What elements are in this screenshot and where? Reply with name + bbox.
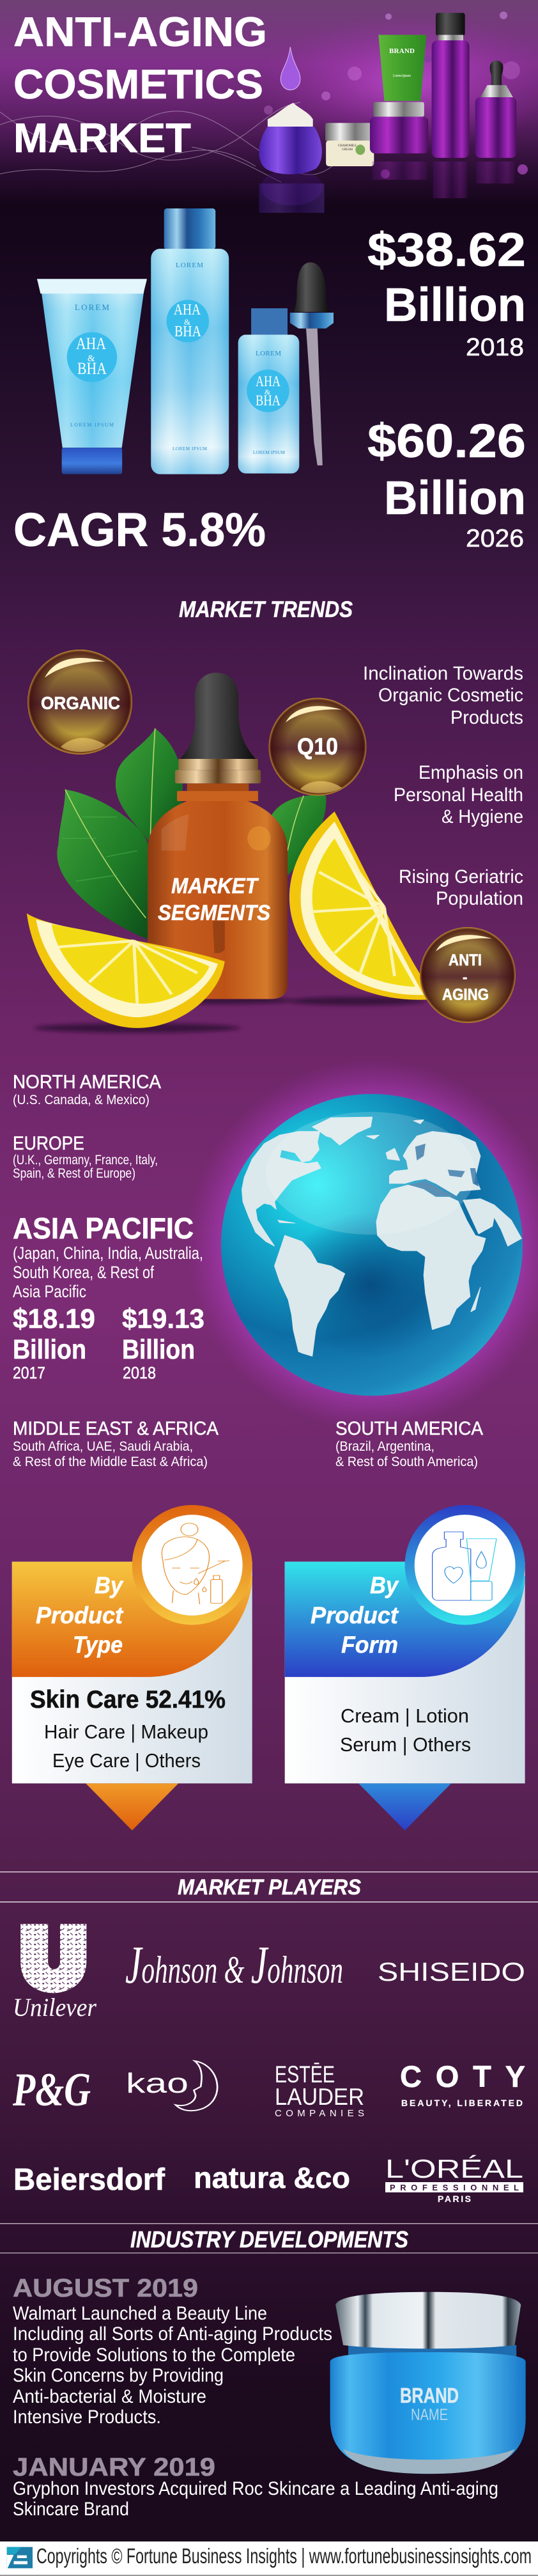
logo: Natura and Co: natura &co — [194, 2161, 350, 2194]
market trends list: & Hygiene — [442, 806, 523, 827]
product labels: & — [184, 317, 190, 327]
jar labels: BRAND — [389, 47, 415, 55]
segment list: Skin Care 52.41% — [30, 1686, 226, 1713]
product labels: AHA — [256, 373, 281, 389]
illustration: blue cream jar: NAME — [411, 2406, 448, 2424]
asia pacific 2018 value: $19.13 — [122, 1304, 204, 1334]
header label: Type — [73, 1632, 123, 1658]
header label: Product — [311, 1602, 399, 1628]
market trends list: Emphasis on — [419, 762, 523, 783]
CAGR: CAGR 5.8% — [13, 503, 266, 556]
cream jar — [325, 123, 374, 166]
development: August 2019: AUGUST 2019 — [13, 2274, 198, 2302]
logo: Kao: kao — [126, 2068, 188, 2099]
region: europe — [13, 1133, 158, 1181]
region: asia pacific: ASIA PACIFIC — [13, 1212, 194, 1245]
bubble: Q10: Q10 — [297, 733, 338, 760]
segment list: Cream | Lotion — [341, 1705, 469, 1727]
jar labels — [338, 47, 415, 152]
region: asia pacific: (Japan, China, India, Australia, — [13, 1244, 203, 1263]
region: middle east and africa: South Africa, UAE, Saudi Arabia, — [13, 1439, 193, 1454]
logo: L'Oreal: PARIS — [438, 2194, 471, 2204]
blue products — [37, 208, 334, 474]
product labels: AHA — [174, 302, 201, 318]
header label: Product — [36, 1602, 124, 1628]
product labels: & — [265, 387, 271, 396]
region: north america: (U.S. Canada, & Mexico) — [13, 1092, 150, 1107]
asia pacific 2018 value: 2018 — [123, 1363, 156, 1382]
purple dropper — [475, 61, 516, 158]
development: August 2019: Anti-bacterial & Moisture — [13, 2386, 206, 2407]
stat: 2018 market size — [367, 223, 526, 361]
logo: Johnson and Johnson: Johnson & Johnson — [125, 1935, 343, 1995]
region: europe: (U.K., Germany, France, Italy, — [13, 1152, 158, 1167]
region: middle east and africa: MIDDLE EAST & AFRICA — [13, 1418, 219, 1439]
header label: By — [370, 1572, 399, 1598]
logo: Estee Lauder: COMPANIES — [275, 2108, 364, 2119]
green tube — [378, 35, 426, 101]
product labels: LOREM IPSUM — [253, 450, 286, 455]
icon: bottle and tube — [405, 1505, 525, 1625]
card pointer — [358, 1783, 451, 1831]
amber bottle — [148, 673, 288, 999]
header shape — [12, 1562, 252, 1677]
development: August 2019: Skin Concerns by Providing — [13, 2365, 224, 2386]
product labels: LOREM IPSUM — [173, 446, 208, 451]
DNA strands — [0, 102, 332, 182]
stat: 2018 market size: $38.62 — [367, 223, 526, 276]
development: January 2019 — [13, 2453, 498, 2520]
jar labels: CHAMOMILE — [338, 144, 357, 148]
bubble: Q10 — [268, 698, 367, 795]
logo: Coty — [400, 2059, 525, 2108]
tube — [37, 279, 147, 474]
stat: 2026 market size — [367, 414, 526, 552]
bottle label — [158, 874, 270, 925]
bokeh glow — [256, 12, 538, 178]
product labels: LOREM IPSUM — [70, 422, 114, 428]
logo: Kao — [126, 2061, 217, 2111]
card body — [12, 1562, 252, 1783]
product labels: LOREM — [256, 350, 281, 357]
header shape — [285, 1562, 525, 1677]
lemon wedge left — [27, 914, 225, 1028]
region: asia pacific — [13, 1212, 204, 1382]
product labels: LOREM — [75, 302, 109, 312]
bottle label: MARKET — [171, 874, 259, 898]
development: August 2019 — [13, 2274, 332, 2428]
leaves — [57, 728, 326, 939]
segment list: Serum | Others — [340, 1733, 471, 1756]
icon: company logo — [7, 2547, 33, 2568]
asia pacific 2017 value: Billion — [13, 1334, 86, 1365]
water drop — [281, 47, 300, 90]
market trends list: Organic Cosmetic — [378, 685, 523, 706]
region: asia pacific: South Korea, & Rest of — [13, 1263, 154, 1282]
header label: By — [95, 1572, 124, 1598]
product labels: LOREM — [176, 262, 203, 269]
title: MARKET — [13, 114, 191, 161]
heading: industry developments: INDUSTRY DEVELOPMENTS — [130, 2226, 408, 2252]
heading: market trends: MARKET TRENDS — [179, 597, 353, 622]
logo: Estee Lauder: ESTĒE — [275, 2061, 335, 2088]
card pointer — [86, 1783, 178, 1831]
region: north america: NORTH AMERICA — [13, 1072, 161, 1093]
header label: Form — [341, 1632, 398, 1658]
continents — [242, 1117, 521, 1356]
title — [13, 8, 267, 161]
bubble: anti-aging: AGING — [442, 986, 489, 1004]
development: August 2019: Intensive Products. — [13, 2407, 161, 2428]
market trends list: Personal Health — [394, 785, 523, 806]
reflections — [259, 162, 515, 213]
header label — [36, 1572, 124, 1658]
jar labels: CREAM — [342, 148, 353, 152]
bubble: organic: ORGANIC — [41, 693, 120, 713]
product labels: & — [88, 354, 95, 364]
panel: by product type — [12, 1505, 252, 1831]
footer — [0, 2541, 538, 2576]
bubble: anti-aging: - — [463, 969, 467, 985]
logo: Unilever — [13, 1924, 96, 2022]
illustration: blue cream jar — [330, 2292, 526, 2474]
product labels: BHA — [174, 324, 202, 340]
logo: Coty: COTY — [400, 2059, 525, 2093]
stat: 2018 market size: Billion — [384, 278, 526, 331]
dropper — [290, 262, 334, 465]
purple jar — [370, 102, 428, 153]
cosmetics jars — [259, 13, 516, 213]
bubble: anti-aging: ANTI — [449, 951, 482, 969]
bottle label: SEGMENTS — [158, 901, 270, 925]
title: ANTI-AGING — [13, 8, 267, 55]
heading: market players: MARKET PLAYERS — [178, 1875, 361, 1900]
product labels — [70, 262, 286, 455]
globe — [187, 1059, 538, 1430]
development: August 2019: Walmart Launched a Beauty Line — [13, 2303, 267, 2324]
region: middle east and africa — [13, 1418, 219, 1469]
market trends list: Inclination Towards — [363, 663, 523, 684]
market trends list: Rising Geriatric — [399, 866, 523, 887]
logo: L'Oreal: PROFESSIONNEL — [390, 2183, 519, 2192]
logo: Estee Lauder: LAUDER — [275, 2084, 364, 2110]
tall purple bottle — [432, 13, 470, 158]
logo: Coty: BEAUTY, LIBERATED — [401, 2098, 523, 2108]
market trends list — [363, 663, 523, 909]
hero banner — [0, 12, 538, 213]
market trends list: Population — [436, 888, 523, 909]
stat: 2026 market size: 2026 — [466, 525, 524, 552]
logo: Unilever: Unilever — [13, 1993, 96, 2022]
jar labels: Lorem Ipsum — [393, 74, 411, 78]
asia pacific 2017 value: 2017 — [13, 1363, 45, 1382]
product labels: AHA — [76, 334, 106, 353]
asia pacific 2017 value — [13, 1304, 95, 1382]
development: August 2019: Including all Sorts of Anti-aging Products — [13, 2323, 332, 2345]
logo: Beiersdorf: Beiersdorf — [13, 2163, 165, 2197]
region: south america: SOUTH AMERICA — [335, 1418, 483, 1439]
shadows — [35, 997, 426, 1033]
development: January 2019: Gryphon Investors Acquired Roc Skincare a Leading Anti-aging — [13, 2478, 498, 2499]
title: COSMETICS — [13, 61, 263, 107]
bubble: organic — [27, 650, 132, 754]
region: south america: (Brazil, Argentina, — [335, 1439, 434, 1454]
stat: 2026 market size: Billion — [384, 471, 526, 524]
region: north america — [13, 1072, 161, 1107]
tall bottle — [151, 208, 229, 474]
region: south america — [335, 1418, 483, 1469]
stat: 2018 market size: 2018 — [466, 334, 524, 361]
segment list — [340, 1705, 471, 1756]
logo: Shiseido: SHISEIDO — [378, 1957, 525, 1987]
lemon wedge right — [289, 811, 436, 1000]
segment list — [30, 1686, 226, 1772]
stat: 2026 market size: $60.26 — [367, 414, 526, 467]
illustration: serum bottle with lemons — [27, 673, 436, 1033]
asia pacific 2018 value: Billion — [122, 1334, 195, 1365]
asia pacific 2018 value — [122, 1304, 204, 1382]
panel: by product form — [285, 1505, 525, 1831]
icon: face with serum — [132, 1505, 252, 1625]
region: europe: Spain, & Rest of Europe) — [13, 1166, 135, 1181]
logo: Estee Lauder — [275, 2061, 364, 2119]
logo: L'Oreal: L'ORÉAL — [385, 2154, 523, 2183]
development: August 2019: to Provide Solutions to the Complete — [13, 2345, 295, 2366]
market trends list: Products — [450, 707, 523, 728]
logo: P&G: P&G — [12, 2064, 91, 2116]
header label — [311, 1572, 399, 1658]
logo: L'Oreal — [385, 2154, 523, 2204]
product labels: BHA — [256, 393, 281, 409]
region: europe: EUROPE — [13, 1133, 84, 1154]
card body — [285, 1562, 525, 1783]
segment list: Hair Care | Makeup — [44, 1721, 208, 1743]
violet jar — [259, 103, 323, 205]
illustration: blue cream jar: BRAND — [400, 2384, 459, 2407]
small bottle — [238, 308, 299, 473]
region: middle east and africa: & Rest of the Middle East & Africa) — [13, 1454, 208, 1469]
development: January 2019: Skincare Brand — [13, 2499, 129, 2520]
region: south america: & Rest of South America) — [335, 1454, 478, 1469]
product labels: BHA — [77, 359, 107, 378]
development: January 2019: JANUARY 2019 — [13, 2453, 215, 2481]
asia pacific 2017 value: $18.19 — [13, 1304, 95, 1334]
bubble: anti-aging — [420, 927, 516, 1023]
region: asia pacific: Asia Pacific — [13, 1282, 86, 1301]
segment list: Eye Care | Others — [52, 1749, 201, 1772]
inner seas — [408, 1144, 479, 1197]
